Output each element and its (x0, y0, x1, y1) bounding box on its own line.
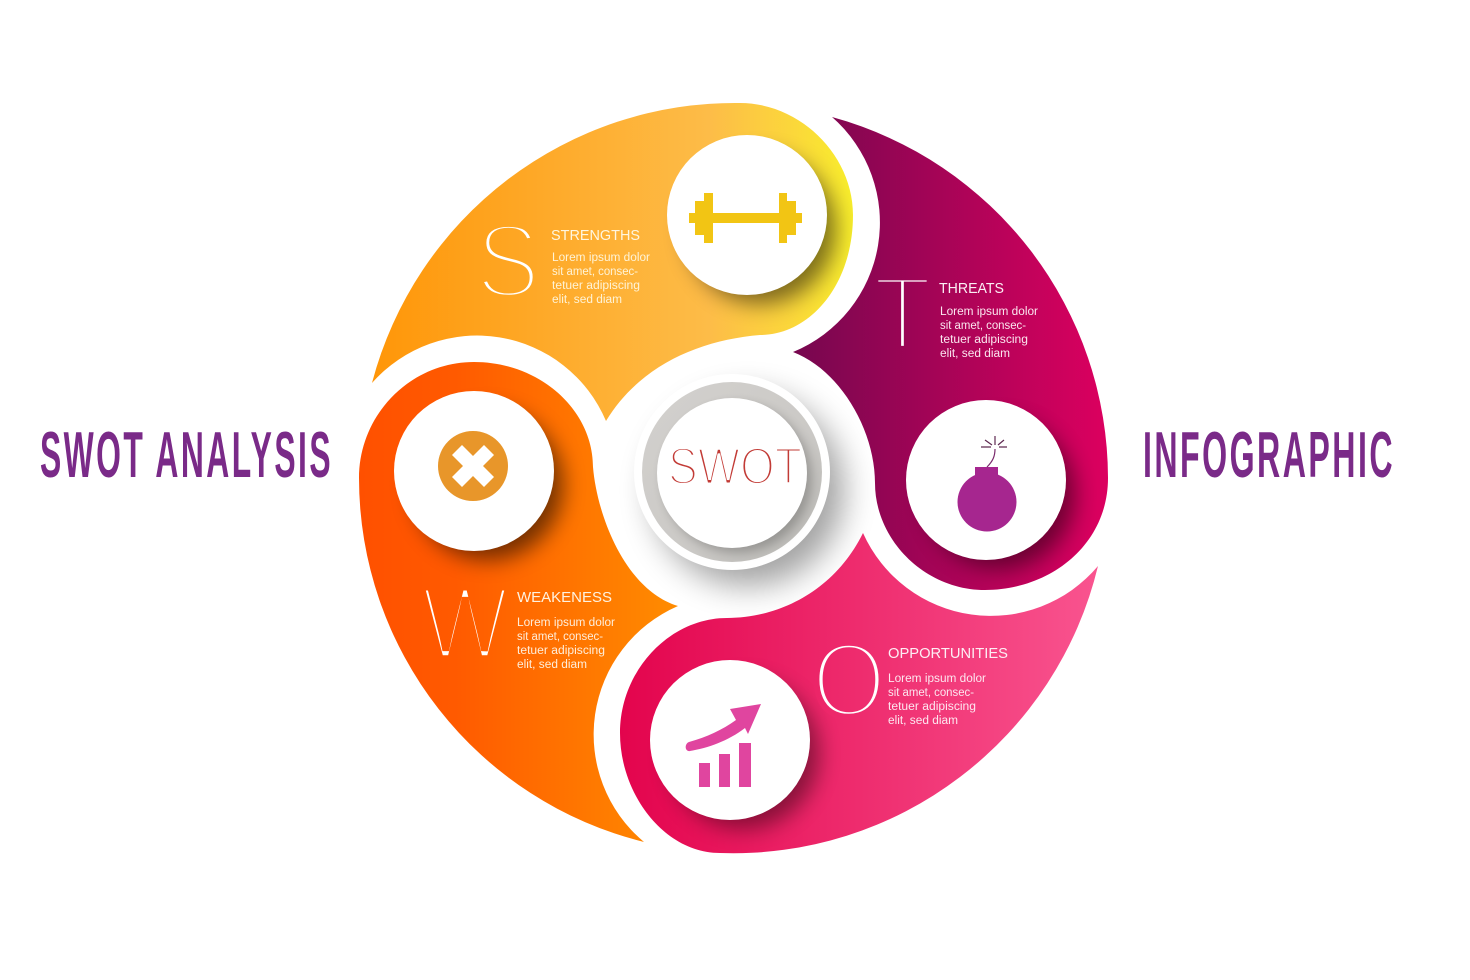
text block: threats: tetuer adipiscing (940, 334, 1028, 346)
big letter W: W (421, 565, 509, 682)
icon circle: dumbbell (667, 135, 827, 295)
text block: weakness: Lorem ipsum dolor (517, 617, 615, 629)
text block: opportunities: tetuer adipiscing (888, 701, 976, 713)
text block: strengths: tetuer adipiscing (552, 280, 640, 292)
text block: opportunities: elit, sed diam (888, 715, 958, 727)
text block: threats: elit, sed diam (940, 348, 1010, 360)
text block: weakness: elit, sed diam (517, 659, 587, 671)
panel: strengths (372, 103, 853, 421)
icon circle: cross (394, 391, 554, 551)
icon circle: bomb (906, 400, 1066, 560)
big letter T: T (873, 255, 932, 372)
heading: opportunities: OPPORTUNITIES (888, 645, 1008, 662)
heading: threats: THREATS (939, 280, 1004, 297)
center circle (634, 374, 830, 570)
big letter O: O (812, 622, 886, 739)
text block: weakness: tetuer adipiscing (517, 645, 605, 657)
heading: strengths: STRENGTHS (551, 227, 640, 244)
center circle shadow (652, 394, 844, 586)
text block: strengths: elit, sed diam (552, 294, 622, 306)
center label: SWOT: SWOT (668, 438, 802, 496)
panel: threats (793, 117, 1108, 590)
text block: strengths: sit amet, consec- (552, 266, 638, 278)
text block: weakness: sit amet, consec- (517, 631, 603, 643)
text: SWOT ANALYSIS (40, 418, 333, 491)
text block: threats: sit amet, consec- (940, 320, 1026, 332)
text block: strengths (552, 252, 650, 306)
icon circle: growth chart (650, 660, 810, 820)
text block: threats (940, 306, 1038, 360)
text block: opportunities: sit amet, consec- (888, 687, 974, 699)
big letter S: S (476, 203, 540, 320)
heading: weakness: WEAKENESS (517, 589, 612, 606)
text block: opportunities (888, 673, 986, 727)
text block: strengths: Lorem ipsum dolor (552, 252, 650, 264)
panel: weakness (359, 362, 678, 842)
text block: threats: Lorem ipsum dolor (940, 306, 1038, 318)
text block: opportunities: Lorem ipsum dolor (888, 673, 986, 685)
text block: weakness (517, 617, 615, 671)
panel: opportunities (620, 533, 1098, 853)
